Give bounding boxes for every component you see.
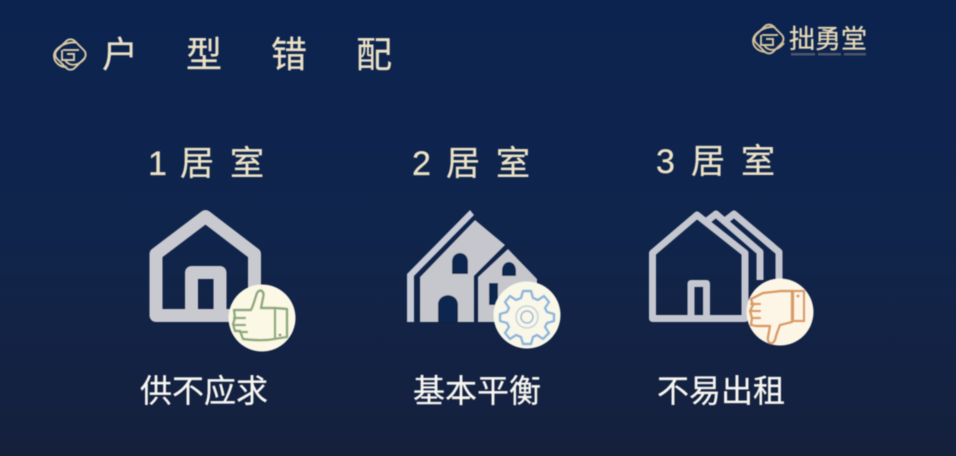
icon: brand logo mark xyxy=(752,22,786,56)
label: basically balanced: 基本平衡 xyxy=(413,373,541,409)
icon: thumbs down badge xyxy=(746,278,814,346)
icon: three-house row xyxy=(652,214,779,318)
label: hard to rent: 不易出租 xyxy=(657,373,785,409)
icon: gear badge xyxy=(494,282,560,348)
heading: 3 rooms: 3居室 xyxy=(656,143,775,181)
panel: 2 rooms xyxy=(407,145,560,409)
icon: thumbs up badge xyxy=(228,284,296,352)
brand tagline (illegible, drawn as faint bars) xyxy=(791,53,866,56)
icon: double-gable house xyxy=(407,210,537,322)
panel: 1 room xyxy=(140,145,296,409)
panel: 3 rooms xyxy=(652,143,814,409)
brand name: 拙勇堂 xyxy=(789,24,867,54)
main content xyxy=(53,22,867,409)
heading: 2 rooms: 2居室 xyxy=(412,145,530,183)
label: short supply: 供不应求 xyxy=(140,373,268,409)
logo: brand xyxy=(752,22,867,56)
title: 户型错配 xyxy=(102,34,392,75)
heading: 1 room: 1居室 xyxy=(148,145,264,183)
icon: title logo mark xyxy=(53,37,88,72)
icon: single house xyxy=(156,216,254,316)
